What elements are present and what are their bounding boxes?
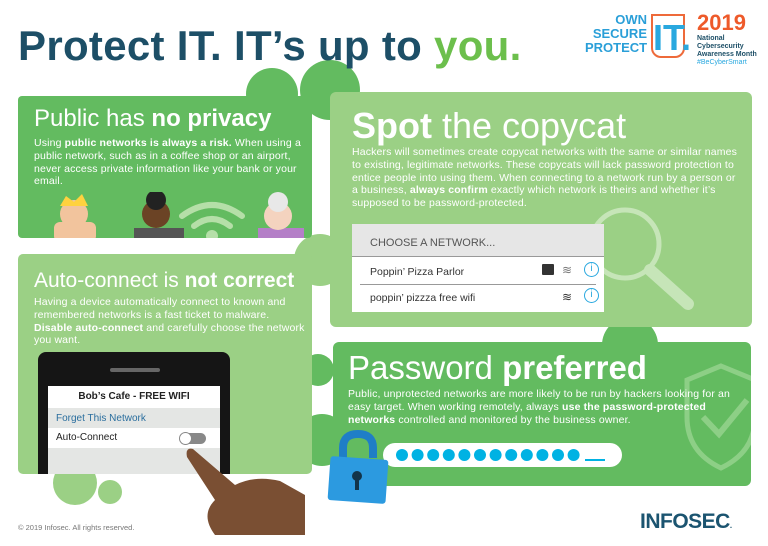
logo: Cybersecurity Awareness Month: PROTECT — [585, 40, 647, 55]
footer copyright: © 2019 Infosec. All rights reserved. — [18, 523, 134, 532]
text block: Having a device automatically connect to known and remembered networks is a fast ticket to malware. Disable auto-connect and carefully choose the network you want. — [34, 296, 305, 346]
logo: Cybersecurity Awareness Month: OWN — [615, 12, 647, 27]
icon: padlock — [328, 430, 388, 504]
logo: Cybersecurity Awareness Month: IT. — [653, 17, 691, 58]
network chooser: Poppin’ Pizza Parlor — [370, 266, 464, 278]
icon: shield — [684, 363, 751, 471]
network chooser: i — [590, 289, 593, 300]
phone — [38, 352, 230, 492]
heading: Auto-connect is not correct — [34, 269, 294, 292]
phone: Auto-Connect — [56, 432, 117, 443]
panel: auto-connect — [18, 254, 312, 474]
text block: Public, unprotected networks are more likely to be run by hackers looking for an easy target. When working remotely, always use the password-protected networks controlled and monitored by the business owner. — [348, 388, 730, 426]
text block: Using public networks is always a risk. When using a public network, such as in a coffee shop or an airport, never access private information like your bank or your email. — [34, 137, 301, 187]
panel: spot the copycat — [330, 92, 752, 327]
logo: Cybersecurity Awareness Month: 2019 — [697, 10, 746, 35]
logo: Cybersecurity Awareness Month: SECURE — [593, 26, 647, 41]
icon: wifi — [179, 202, 245, 238]
logo: Cybersecurity Awareness Month: Awareness Month — [697, 51, 757, 58]
people illustrations — [54, 192, 304, 238]
text block: Hackers will sometimes create copycat networks with the same or similar names to existing, legitimate networks. These copycats will lack password protection to entice people into using them. When connecting to a network run by a person or a business, always confirm exactly which network is theirs and whether it’s supposed to be password-protected. — [352, 146, 737, 209]
password field — [383, 443, 622, 467]
network chooser: ≋ — [562, 263, 572, 277]
network chooser: poppin’ pizzza free wifi — [370, 292, 475, 304]
heading: Spot the copycat — [352, 105, 626, 146]
title: Protect IT. IT’s up to you. — [18, 22, 522, 69]
logo: Cybersecurity Awareness Month: National Cybersecurity — [697, 35, 744, 50]
logo: Cybersecurity Awareness Month: #BeCyberSmart — [697, 59, 747, 66]
panel: password preferred — [333, 342, 751, 486]
heading: Password preferred — [348, 349, 647, 386]
logo: infosec: INFOSEC. — [640, 510, 732, 533]
network chooser — [352, 224, 604, 312]
network chooser: CHOOSE A NETWORK... — [370, 237, 495, 249]
heading: Public has no privacy — [34, 105, 271, 132]
icon: magnifier — [594, 208, 694, 310]
network chooser: i — [590, 263, 593, 274]
logo: Cybersecurity Awareness Month — [585, 10, 757, 66]
phone: Bob’s Cafe - FREE WIFI — [78, 391, 190, 402]
phone: Forget This Network — [56, 413, 146, 424]
panel: public has no privacy — [18, 96, 312, 238]
network chooser: ≋ — [562, 290, 572, 304]
icon: pointing hand — [186, 448, 305, 535]
